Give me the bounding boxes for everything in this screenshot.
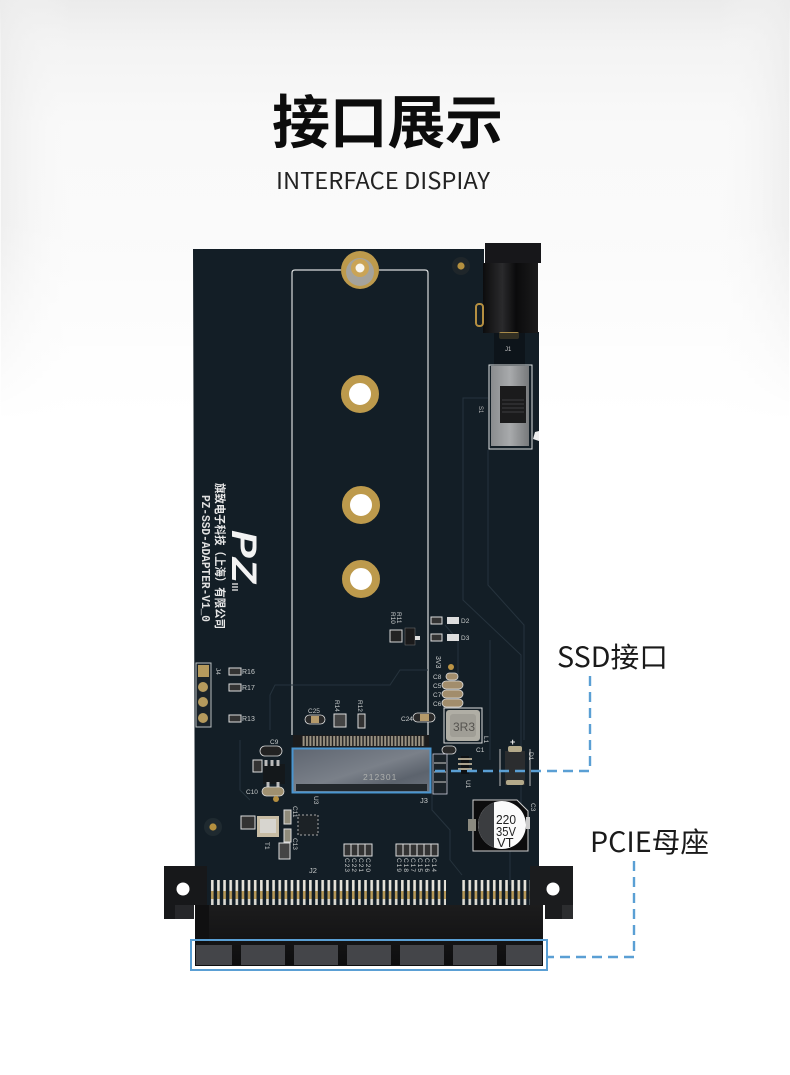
slide switch S1 (477, 365, 539, 449)
diode D1 (500, 737, 534, 786)
resistors R10 R11: R10 (389, 612, 396, 624)
mounting hole 4 (346, 564, 376, 594)
resistors R16 R17 R13: R17 (242, 685, 255, 692)
decoupling caps C19-C14: C14 (430, 858, 437, 872)
model name: PZ-SSD-ADAPTER-V1_0 (198, 495, 211, 622)
capacitor C3: 220 (496, 812, 516, 827)
PCIe left ear (164, 866, 207, 919)
caps C8 C5 C7 C6: C8 (433, 674, 442, 681)
regulator U1 and small caps (433, 746, 485, 794)
crystal and U3: T1 (263, 842, 270, 850)
inductor L1 (444, 708, 489, 744)
resistors R16 R17 R13 (229, 668, 255, 723)
test pad lower (204, 818, 222, 836)
label: PCIe socket: PCIE母座 (590, 821, 709, 861)
C25 R14 R12 C24: C25 (308, 708, 320, 715)
capacitor C3: VT (497, 835, 514, 850)
label: SSD interface: SSD接口 (557, 636, 668, 676)
PCIe right ear (530, 866, 573, 919)
caps C8 C5 C7 C6: C5 (433, 683, 442, 690)
LEDs D2 D3: D2 (461, 618, 470, 625)
decoupling caps C23-C20: C20 (364, 858, 371, 872)
decoupling caps C23-C20: C23 (343, 858, 350, 872)
M.2 outline (292, 270, 428, 735)
decoupling caps C19-C14: C19 (395, 858, 402, 872)
resistors R10 R11 (389, 612, 402, 642)
capacitor C3: 35V (496, 824, 516, 839)
decoupling caps C19-C14: C18 (402, 858, 409, 872)
regulator U1 and small caps: C1 (476, 747, 485, 754)
M.2 socket J3 (293, 749, 430, 792)
diode D1: D1 (527, 752, 534, 761)
decoupling caps C19-C14: C15 (416, 858, 423, 872)
caps C8 C5 C7 C6: C7 (433, 692, 442, 699)
test point 3V3 (434, 656, 454, 670)
test point 3V3: 3V3 (434, 656, 441, 669)
background (0, 0, 790, 421)
PCIe socket teeth (196, 945, 542, 965)
label J2: J2 (309, 866, 317, 875)
logo PZ: PZ (224, 530, 263, 585)
mounting hole 3 (346, 490, 376, 520)
resistors R16 R17 R13: R13 (242, 716, 255, 723)
regulator U1 and small caps: U1 (464, 780, 471, 789)
resistors R16 R17 R13: R16 (242, 669, 255, 676)
traces (240, 398, 524, 885)
header J4 (196, 663, 221, 727)
board substrate (193, 249, 539, 905)
inductor L1: 3R3 (453, 720, 475, 734)
diode D1: + (510, 737, 515, 747)
DC jack J1 (476, 243, 541, 366)
title: 接口展示 (272, 91, 503, 156)
leader line: SSD (432, 676, 590, 771)
M.2 area components near top (196, 612, 536, 875)
decoupling caps C23-C20: C22 (350, 858, 357, 872)
caps C8 C5 C7 C6 (433, 673, 463, 708)
transistor Q1 (405, 628, 420, 645)
test pad (452, 257, 470, 275)
crystal and U3: C11 (291, 806, 298, 818)
M.2 socket rear pins (293, 735, 429, 749)
crystal and U3: C13 (291, 838, 298, 850)
highlight box: PCIe socket (191, 940, 547, 970)
C25 R14 R12 C24 (305, 700, 435, 728)
decoupling caps C23-C20: C21 (357, 858, 364, 872)
PCIe pins (210, 880, 530, 906)
decoupling caps C19-C14 (395, 844, 438, 872)
company name: 旗致电子科技（上海）有限公司 (213, 483, 227, 629)
PCIe socket body (195, 905, 543, 966)
C25 R14 R12 C24: C24 (401, 716, 413, 723)
U2 area: C10 (246, 789, 258, 796)
header J4: J4 (214, 668, 221, 675)
slide switch S1: S1 (477, 406, 483, 414)
crystal and U3 (241, 796, 319, 859)
LEDs D2 D3 (431, 617, 470, 642)
C25 R14 R12 C24: R12 (356, 700, 363, 712)
crystal and U3: U3 (312, 796, 319, 805)
LEDs D2 D3: D3 (461, 635, 470, 642)
U2 area: C9 (270, 739, 279, 746)
caps C8 C5 C7 C6: C6 (433, 701, 442, 708)
M.2 socket J3: 212301 (363, 772, 397, 782)
mounting hole 2 (345, 379, 375, 409)
leader line: PCIe (548, 861, 634, 957)
decoupling caps C19-C14: C16 (423, 858, 430, 872)
mounting hole: standoff (341, 251, 379, 289)
label J3: J3 (420, 796, 428, 805)
inductor L1: L1 (482, 736, 489, 744)
capacitor C3: C3 (529, 803, 536, 812)
decoupling caps C19-C14: C17 (409, 858, 416, 872)
resistors R10 R11: R11 (395, 612, 402, 624)
subtitle: INTERFACE DISPIAY (276, 162, 491, 196)
DC jack J1: J1 (505, 347, 512, 353)
C25 R14 R12 C24: R14 (333, 700, 340, 712)
highlight box: SSD socket (292, 748, 430, 792)
U2 area (246, 739, 285, 802)
capacitor C3 (468, 800, 536, 851)
decoupling caps C23-C20 (343, 844, 372, 872)
circuit board (164, 243, 573, 966)
